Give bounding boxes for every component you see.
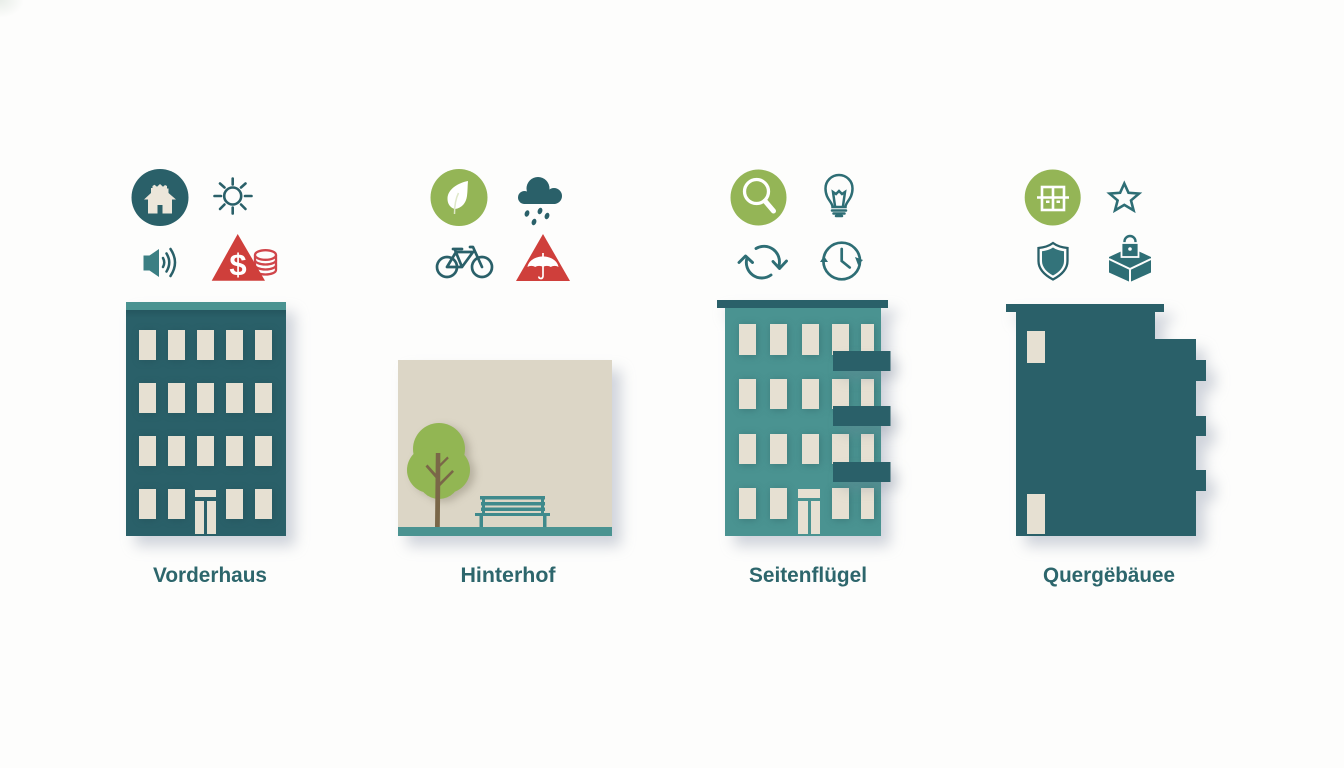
icon: refresh arrows xyxy=(739,246,786,278)
bench xyxy=(475,496,550,527)
column: Quergebäude xyxy=(1006,170,1206,587)
windows xyxy=(739,324,874,519)
icon: speaker xyxy=(144,249,175,277)
label: Hinterhof: Hinterhof xyxy=(460,564,557,587)
icon: clock xyxy=(820,243,863,279)
balconies xyxy=(833,351,890,482)
door xyxy=(798,489,820,534)
icon: warning triangle with umbrella xyxy=(516,234,570,281)
coins xyxy=(255,250,276,274)
icon: warning triangle with dollar and coins xyxy=(212,234,276,282)
label: Vorderhaus: Vorderhaus xyxy=(153,564,267,587)
building: Seitenflügel xyxy=(717,300,890,536)
icon: locked box xyxy=(1109,236,1151,282)
windows xyxy=(1027,331,1045,534)
icon: sun xyxy=(214,178,252,214)
icon: star xyxy=(1110,184,1139,210)
icon: rain cloud xyxy=(518,177,562,226)
column: Vorderhaus xyxy=(126,169,286,587)
door xyxy=(195,490,216,534)
icon: magnifier in circle xyxy=(730,170,786,226)
icon: house in circle xyxy=(132,169,188,226)
label: Seitenflügel: Seitenflügel xyxy=(749,564,867,587)
ground strip xyxy=(398,527,612,536)
column: Seitenflügel xyxy=(717,170,890,587)
windows xyxy=(139,330,272,519)
building: courtyard panel xyxy=(398,360,612,536)
icon: light bulb xyxy=(826,175,852,216)
triangle xyxy=(212,234,265,281)
building: Vorderhaus xyxy=(126,302,286,536)
building: Quergebäude xyxy=(1006,304,1206,536)
icon: window in circle xyxy=(1025,170,1081,226)
icon: shield xyxy=(1038,243,1068,280)
icon: leaf in circle xyxy=(430,169,488,226)
label: Quergëbäuee: Quergëbäuee xyxy=(1043,564,1175,587)
column: Hinterhof xyxy=(398,169,612,587)
dollar sign: $ xyxy=(229,247,247,282)
tree xyxy=(407,423,470,527)
icon: bicycle xyxy=(437,247,492,277)
